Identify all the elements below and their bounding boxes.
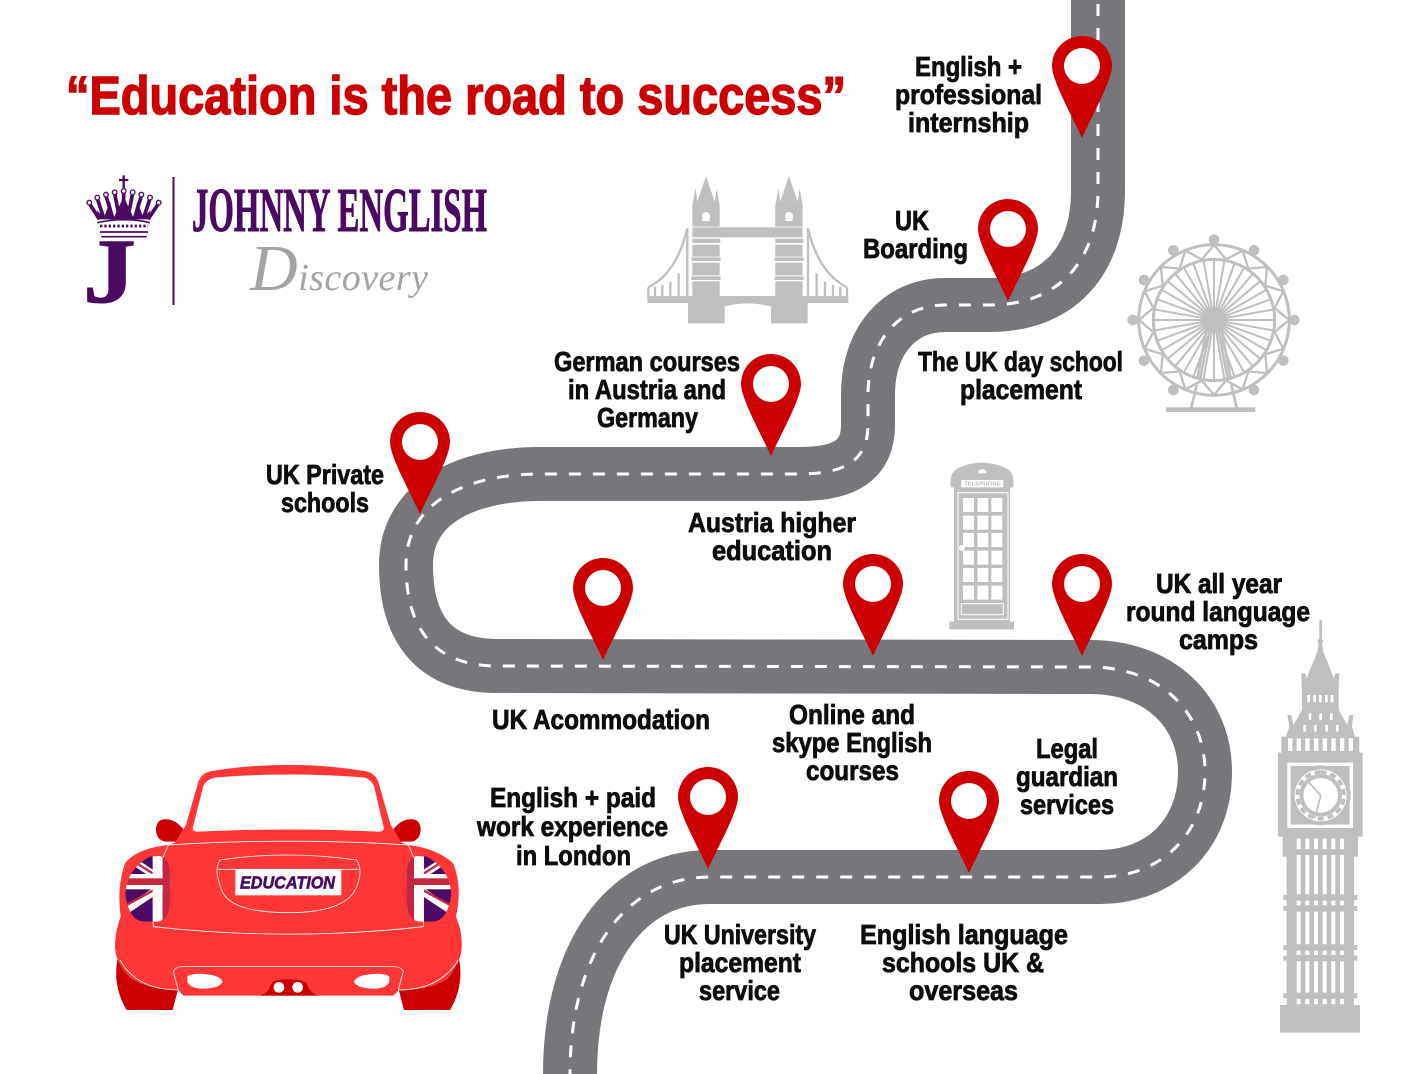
label: UK Acommodation: UK Acommodation — [492, 704, 710, 735]
label: The UK day school placement — [918, 346, 1123, 405]
label: German courses — [554, 346, 740, 433]
logo: Johnny English Discovery — [83, 175, 487, 322]
number plate — [235, 869, 341, 895]
icon: Big Ben — [1278, 620, 1363, 1033]
label: UK University placement service — [664, 919, 816, 1006]
label: English + professional internship: professional — [895, 79, 1042, 110]
icon: telephone box — [949, 463, 1014, 629]
label: UK Boarding — [863, 205, 968, 264]
label: German courses: in Austria and — [568, 374, 726, 405]
label: German courses: Germany — [597, 402, 698, 433]
label: Legal guardian services — [1016, 733, 1118, 820]
car trim lines — [120, 841, 458, 990]
pin: English language schools — [939, 771, 999, 873]
icon: crown — [87, 175, 161, 237]
label: UK Boarding: UK — [895, 205, 929, 236]
icon: J monogram: J — [83, 220, 136, 322]
label: Online and skype English courses: courses — [806, 755, 899, 786]
label: Online and skype English courses: skype English — [772, 727, 932, 758]
car mirrors — [156, 819, 421, 842]
pin: Austria higher education — [843, 554, 903, 656]
label: English + professional internship: internship — [908, 107, 1029, 138]
icon: red car — [115, 765, 462, 1010]
label: UK all year round language camps — [1126, 568, 1310, 655]
logo script word: Discovery — [249, 232, 428, 305]
logo wordmark: JOHNNY ENGLISH — [192, 177, 487, 245]
icon: London Eye — [1127, 234, 1300, 412]
label: Austria higher education — [688, 507, 856, 566]
title: “Education is the road to success” — [66, 66, 846, 126]
pin: UK all year camps — [1052, 554, 1112, 656]
label: Austria higher education: Austria higher — [688, 507, 856, 538]
label: English + paid work experience in London — [476, 782, 668, 871]
label: Legal guardian services: Legal — [1036, 733, 1098, 764]
pin: UK Acommodation — [573, 558, 633, 660]
label: English language schools UK & overseas — [860, 919, 1068, 1006]
label: English + paid work experience in London: work experience — [476, 811, 668, 842]
plate text: EDUCATION — [240, 873, 336, 893]
icon: telephone box: TELEPHONE — [964, 482, 1001, 488]
label: English language schools UK & overseas: overseas — [909, 975, 1018, 1006]
label: Legal guardian services: guardian — [1016, 761, 1118, 792]
label: UK Boarding: Boarding — [863, 233, 968, 264]
label: English language schools UK & overseas: schools UK & — [882, 947, 1044, 978]
label: English + professional internship: English + — [915, 51, 1022, 82]
road centre line — [406, 4, 1205, 1074]
pin: German courses — [741, 354, 801, 456]
car reflectors — [187, 974, 389, 989]
pin: English + paid work — [678, 767, 738, 869]
label: UK all year round language camps: camps — [1179, 624, 1258, 655]
car window — [193, 774, 384, 832]
label: UK Private schools: UK Private — [266, 459, 384, 490]
label: Legal guardian services: services — [1020, 789, 1114, 820]
tail light right — [406, 856, 452, 922]
label: Online and skype English courses: Online and — [789, 699, 915, 730]
logo divider — [172, 177, 174, 305]
road — [406, 0, 1205, 1074]
label: UK University placement service: UK University — [664, 919, 816, 950]
pin: UK Boarding — [978, 199, 1038, 301]
label: English + paid work experience in London: in London — [516, 840, 631, 871]
label: English + paid work experience in London: English + paid — [490, 782, 656, 813]
label: German courses: German courses — [554, 346, 740, 377]
pin: professional internship — [1052, 36, 1112, 138]
exhaust — [260, 979, 318, 996]
label: The UK day school placement: placement — [960, 374, 1082, 405]
label: UK all year round language camps: UK all year — [1156, 568, 1282, 599]
label: Austria higher education: education — [712, 535, 832, 566]
label: UK Private schools: schools — [281, 487, 369, 518]
label: UK University placement service: service — [699, 975, 780, 1006]
label: UK all year round language camps: round language — [1126, 596, 1310, 627]
label: English language schools UK & overseas: English language — [860, 919, 1068, 950]
label: UK University placement service: placement — [679, 947, 801, 978]
pin: UK Private schools — [390, 412, 450, 514]
icon: Tower Bridge — [647, 176, 848, 323]
label: UK Private schools — [266, 459, 384, 518]
car wheels — [116, 960, 460, 1010]
label: English + professional internship — [895, 51, 1042, 138]
label: Online and skype English courses — [772, 699, 932, 786]
car body — [115, 765, 462, 996]
tail light left — [125, 856, 170, 922]
label: The UK day school placement: The UK day school — [918, 346, 1123, 377]
